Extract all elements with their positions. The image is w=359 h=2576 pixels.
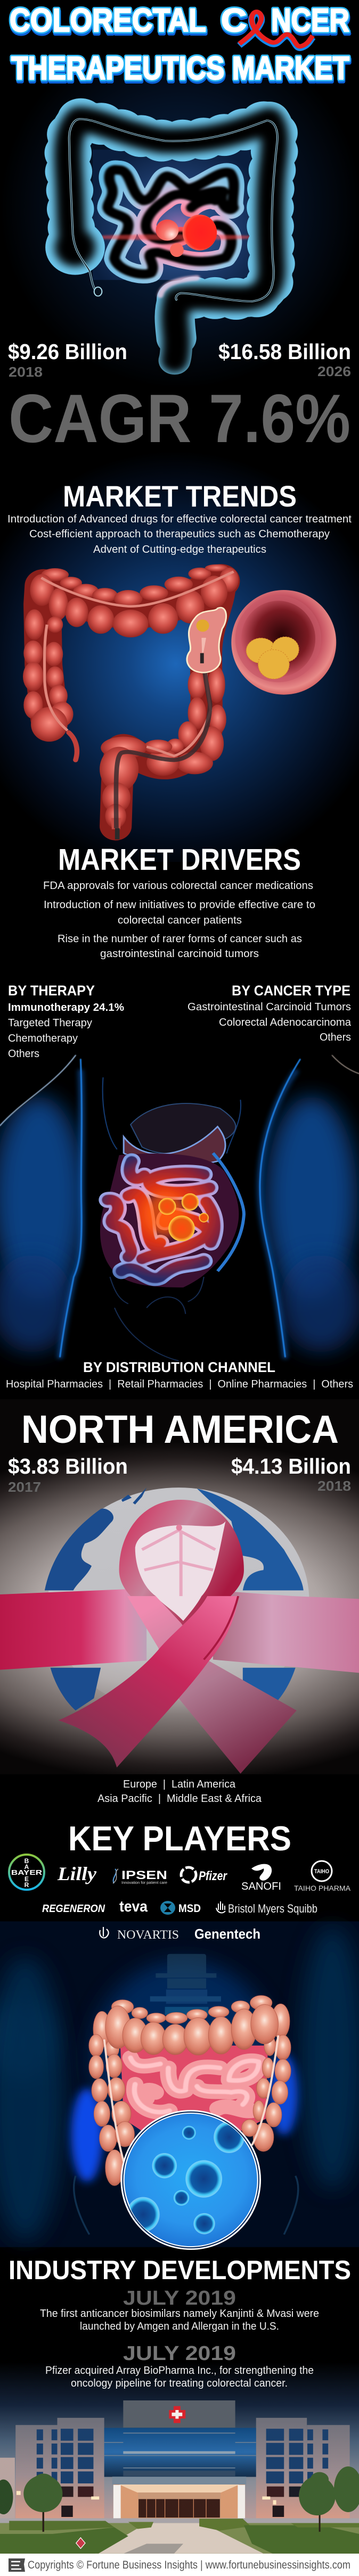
icon: red cross <box>169 2406 185 2423</box>
market drivers list: Rise in the number of rarer forms of cancer such as <box>58 933 302 945</box>
bottom tip <box>111 818 121 829</box>
logo: bayer: A <box>25 1863 29 1871</box>
continents left <box>45 1488 146 1710</box>
hedges <box>0 2519 359 2554</box>
panel: hero intestine illustration <box>0 74 359 404</box>
icon: fortune business insights logo <box>9 2558 25 2572</box>
stat: 2018 value <box>8 339 127 380</box>
pelvis outline <box>74 2176 298 2234</box>
development 2: Pfizer acquired Array BioPharma Inc., for strengthening the <box>45 2365 314 2376</box>
cancer cells <box>127 2121 244 2234</box>
stat: 2018 value: $4.13 Billion <box>231 1454 351 1478</box>
market trends list: Cost-efficient approach to therapeutics such as Chemotherapy <box>29 528 330 540</box>
segment: by therapy: Targeted Therapy <box>8 1017 92 1029</box>
segment: by cancer type: BY CANCER TYPE <box>232 983 350 999</box>
logo: pfizer <box>181 1867 227 1883</box>
red flare <box>87 234 261 240</box>
stat: 2026 value: $16.58 Billion <box>218 339 351 364</box>
segment: by cancer type: Colorectal Adenocarcinoma <box>219 1017 352 1028</box>
other regions: Asia Pacific | Middle East & Africa <box>97 1793 262 1805</box>
market trends list: Introduction of Advanced drugs for effective colorectal cancer treatment <box>7 513 352 525</box>
logo: ipsen <box>113 1868 167 1885</box>
lawn and driveway <box>0 2519 359 2554</box>
endoscope <box>116 653 210 828</box>
title outline: C <box>221 2 247 38</box>
tumor cells <box>159 1194 208 1241</box>
logo: bayer: R <box>25 1881 29 1889</box>
colon taeniae bands <box>41 572 234 756</box>
logo: bayer: BAYER <box>11 1868 43 1876</box>
stomach and ribs <box>130 1103 236 1153</box>
arm mask <box>0 1019 359 1125</box>
other regions: Europe | Latin America <box>123 1779 236 1790</box>
magnifier lens <box>121 2110 260 2249</box>
stat: 2018 value: 2018 <box>317 1478 351 1494</box>
stat: 2017 value: 2017 <box>8 1479 41 1495</box>
development 1 <box>40 2287 319 2332</box>
stat: 2018 value: 2018 <box>9 364 43 380</box>
ribbon loop <box>119 1500 244 1629</box>
logo: bayer: B <box>25 1857 29 1865</box>
stat: 2018 value: $9.26 Billion <box>8 339 127 364</box>
heading: market drivers: MARKET DRIVERS <box>58 843 301 877</box>
logo: bayer <box>9 1855 44 1890</box>
panel: north america background <box>0 1399 359 1774</box>
logo: regeneron: REGENERON <box>42 1903 105 1915</box>
trees <box>0 2466 359 2532</box>
segment: by cancer type <box>187 983 352 1043</box>
globe <box>48 1488 309 1714</box>
development 1: launched by Amgen and Allergan in the U.S. <box>80 2321 279 2332</box>
market drivers list: colorectal cancer patients <box>118 915 242 926</box>
title extrusion: COLORECTAL <box>10 4 207 40</box>
right tail of ribbon <box>127 1596 297 1774</box>
logo: novartis: NOVARTIS <box>117 1928 179 1941</box>
continents right <box>197 1489 304 1710</box>
colon base <box>43 581 221 826</box>
large intestine lobes <box>89 1996 291 2186</box>
logo: pfizer: Pfizer <box>199 1869 227 1883</box>
logo: sanofi: SANOFI <box>241 1881 281 1892</box>
segment: by therapy: Immunotherapy 24.1% <box>8 1002 124 1013</box>
loop interior with figure <box>135 1521 226 1621</box>
stat: 2026 value: 2026 <box>317 363 351 379</box>
torso silhouette <box>59 1056 300 1377</box>
logo: taiho pharma <box>294 1861 351 1892</box>
large intestine glow tube <box>45 119 278 360</box>
CAGR period: 2019-2026 <box>137 447 222 466</box>
title extrusion: C <box>222 4 247 40</box>
orange hot spot <box>144 1192 185 1236</box>
icon: red ribbon <box>239 12 313 48</box>
logo: teva: teva <box>119 1898 148 1915</box>
illustration: glowing torso <box>0 1019 359 1377</box>
tumors <box>156 214 217 257</box>
segment: by therapy <box>8 983 124 1060</box>
lamps <box>17 2491 276 2505</box>
ribbon horizontal band <box>0 1589 146 1670</box>
small intestine <box>108 170 234 274</box>
logo: taiho pharma: TAIHO PHARMA <box>294 1884 351 1892</box>
title outline <box>10 2 349 86</box>
lower pelvis <box>110 1277 204 1361</box>
segment: by therapy: Others <box>8 1048 39 1060</box>
market drivers list: gastrointestinal carcinoid tumors <box>100 948 259 960</box>
segment: by therapy: Chemotherapy <box>8 1033 78 1044</box>
logo: ipsen: IPSEN <box>121 1868 167 1882</box>
taenia strips <box>104 2035 278 2162</box>
heading: north america: NORTH AMERICA <box>21 1407 339 1451</box>
body edge lines <box>0 1056 359 1357</box>
title white: COLORECTAL <box>10 2 206 38</box>
segment: by distribution channel: Hospital Pharmacies | Retail Pharmacies | Online Pharmacies | Others <box>6 1378 353 1390</box>
logo: bayer: E <box>25 1875 29 1883</box>
segment: by distribution channel <box>6 1359 353 1390</box>
logo: genentech: Genentech <box>194 1926 260 1942</box>
market drivers list: Introduction of new initiatives to provide effective care to <box>44 899 315 911</box>
market drivers list <box>43 880 315 960</box>
stat: 2018 value <box>231 1454 351 1494</box>
central glass <box>104 2428 256 2477</box>
panel: colon with magnified cells <box>0 1921 359 2249</box>
other regions <box>97 1779 262 1805</box>
logo: novartis <box>100 1927 179 1941</box>
central tower top <box>123 2400 235 2428</box>
segment: by therapy: BY THERAPY <box>8 983 95 999</box>
logo: sanofi <box>241 1864 281 1892</box>
segment: by distribution channel: BY DISTRIBUTION CHANNEL <box>83 1359 275 1375</box>
title white: C <box>221 2 247 38</box>
stat: 2017 value: $3.83 Billion <box>8 1454 128 1478</box>
stat: 2017 value <box>8 1454 128 1495</box>
title outline: COLORECTAL <box>10 2 206 38</box>
market trends list: Advent of Cutting-edge therapeutics <box>93 544 266 555</box>
entrance canopy <box>112 2477 246 2484</box>
stat: 2026 value <box>218 339 351 379</box>
internal thin line <box>69 119 278 301</box>
market trends list <box>7 513 352 555</box>
panel: hospital building photo <box>0 2362 359 2554</box>
illustration: red colon with endoscope <box>23 564 336 840</box>
market drivers list: FDA approvals for various colorectal cancer medications <box>43 880 313 892</box>
logo: taiho pharma: TAIHO <box>314 1868 329 1875</box>
title <box>10 2 350 88</box>
development 2: JULY 2019 <box>123 2342 236 2365</box>
hospital wings <box>15 2418 350 2519</box>
appendix <box>69 733 77 760</box>
intestine body <box>100 1153 239 1287</box>
logo: bristol myers squibb: Bristol Myers Squibb <box>228 1902 317 1915</box>
inset: opened colon polyp <box>187 608 226 672</box>
logo: msd: MSD <box>178 1902 201 1915</box>
segment: by cancer type: Others <box>320 1032 351 1043</box>
spine <box>150 1954 221 2015</box>
title white <box>10 2 349 86</box>
logo: msd <box>160 1901 201 1915</box>
title extrusion <box>10 4 350 88</box>
heading: key players: KEY PLAYERS <box>68 1819 291 1858</box>
small intestine <box>120 2046 268 2131</box>
road sign <box>76 2538 85 2548</box>
inset: tumour cross-section <box>231 590 336 695</box>
pink rectum highlight <box>160 278 197 295</box>
intestine loops <box>108 1161 215 1278</box>
left tail of ribbon <box>59 1596 238 1767</box>
wing windows <box>37 2429 328 2517</box>
footer bar <box>0 2554 359 2576</box>
logo: ipsen: Innovation for patient care <box>121 1881 167 1885</box>
blue background <box>0 1921 359 2247</box>
background glows <box>0 1096 85 1300</box>
segment: by cancer type: Gastrointestinal Carcinoid Tumors <box>187 1001 351 1013</box>
development 2 <box>45 2342 314 2389</box>
development 1: JULY 2019 <box>123 2287 236 2309</box>
logo: lilly: Lilly <box>57 1863 97 1884</box>
panel: market trends background <box>0 447 359 862</box>
illustration: globe and awareness ribbon <box>0 1488 359 1774</box>
left background building <box>0 2458 15 2519</box>
development 2: oncology pipeline for treating colorectal cancer. <box>71 2378 288 2389</box>
development 1: The first anticancer biosimilars namely Kanjinti & Mvasi were <box>40 2308 319 2320</box>
heading: market trends: MARKET TRENDS <box>63 479 297 513</box>
inner abdominal glow <box>93 149 251 280</box>
colon lobes <box>23 564 239 828</box>
